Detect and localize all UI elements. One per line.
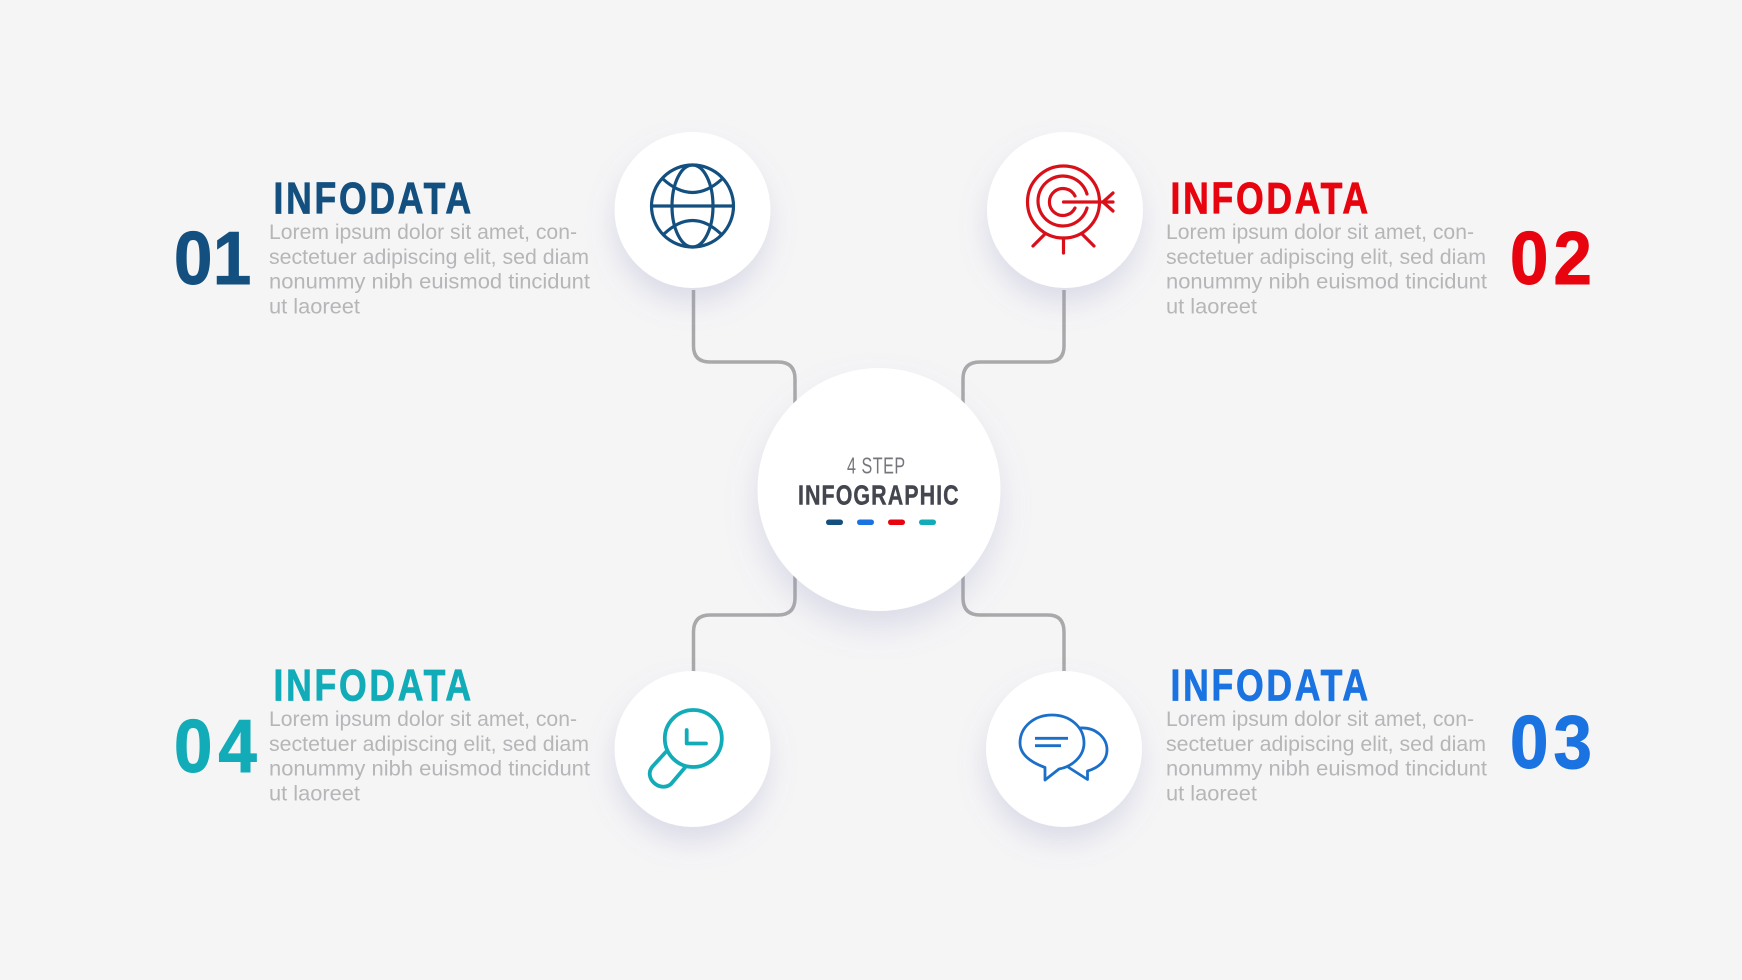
panel: step 4 [174,661,770,827]
step 2 body [1166,220,1487,318]
icon: target [1028,166,1113,253]
step 3 number: 03 [1510,701,1592,785]
step 1 title: INFODATA [274,174,471,223]
step 4 circle [614,671,770,827]
step 4 title: INFODATA [274,661,471,710]
step 1 number: 01 [174,217,251,301]
center heading: INFOGRAPHIC [798,481,959,511]
connector: step 2 to center [963,290,1064,405]
icon: magnifier with clock [650,710,722,787]
step 3 body: nonummy nibh euismod tincidunt [1166,757,1487,781]
step 1 body: nonummy nibh euismod tincidunt [269,270,590,294]
step 4 body: ut laoreet [269,782,360,806]
step 2 body: ut laoreet [1166,294,1257,318]
step 2 body: nonummy nibh euismod tincidunt [1166,270,1487,294]
step 3 body: Lorem ipsum dolor sit amet, con- [1166,707,1474,731]
step 2 body: Lorem ipsum dolor sit amet, con- [1166,220,1474,244]
connector: step 1 to center [694,290,795,405]
panel: center circle [758,368,1000,611]
step 3 body [1166,707,1487,806]
step 3 body: sectetuer adipiscing elit, sed diam [1166,732,1486,756]
step 1 body [269,220,590,318]
step 3 title: INFODATA [1170,661,1368,710]
step 1 body: ut laoreet [269,294,360,318]
connector: step 4 to center [694,575,795,672]
step 1 circle [614,132,770,288]
step 1 body: sectetuer adipiscing elit, sed diam [269,245,589,269]
connector: step 3 to center [963,575,1064,672]
step 3 body: ut laoreet [1166,782,1257,806]
icon: globe [652,165,734,247]
step 2 title: INFODATA [1170,174,1368,223]
step 2 number: 02 [1510,217,1592,301]
step 4 body [269,707,590,806]
center subheading: 4 STEP [847,454,905,479]
step 4 body: nonummy nibh euismod tincidunt [269,757,590,781]
panel: step 3 [986,661,1592,827]
icon: chat bubbles [1020,715,1107,780]
step 2 circle [987,132,1143,288]
step 4 number: 04 [174,705,257,789]
colour dashes [826,520,936,525]
step 4 body: Lorem ipsum dolor sit amet, con- [269,707,577,731]
step 2 body: sectetuer adipiscing elit, sed diam [1166,245,1486,269]
step 1 body: Lorem ipsum dolor sit amet, con- [269,220,577,244]
panel: step 1 [174,132,770,318]
step 3 circle [986,671,1142,827]
step 4 body: sectetuer adipiscing elit, sed diam [269,732,589,756]
panel: step 2 [987,132,1592,318]
